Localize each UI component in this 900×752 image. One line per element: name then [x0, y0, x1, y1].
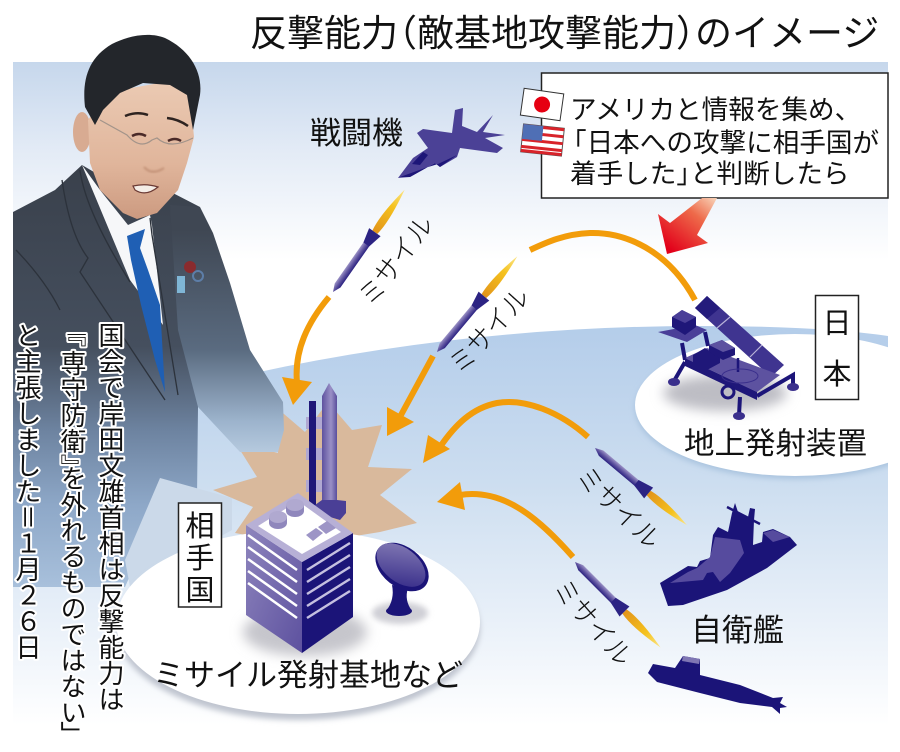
enemy island — [116, 530, 480, 714]
label: missile 2: ミサイル — [443, 283, 535, 380]
arrow: from launcher — [387, 233, 695, 436]
red arrow — [658, 198, 717, 254]
label: ground launcher: 地上発射装置 — [684, 427, 867, 461]
label: missile base: ミサイル発射基地など — [153, 658, 463, 693]
photo: Prime Minister Kishida — [13, 35, 284, 587]
caption: 『 — [57, 321, 87, 347]
lapel pins — [177, 261, 203, 293]
lapel lines — [16, 170, 178, 400]
callout box: アメリカと情報を集め、 — [570, 95, 861, 125]
arrow: from submarine — [437, 482, 573, 557]
missile from ship — [591, 443, 691, 530]
icon: launcher vehicle — [658, 296, 799, 420]
label: Japan box — [816, 296, 858, 400]
label: Japan box: 本 — [822, 358, 852, 391]
title: 反撃能力（敵基地攻撃能力）のイメージ — [250, 13, 879, 54]
label: Japan box: 日 — [822, 308, 852, 340]
icon: Japan flag — [520, 88, 564, 121]
jacket — [13, 165, 200, 587]
icon: ship — [660, 503, 797, 606]
label: missile 3: ミサイル — [570, 461, 665, 555]
label: enemy state box: 相 — [185, 510, 215, 543]
callout box: 着手した」と判断したら — [570, 159, 850, 189]
missile from submarine — [570, 557, 666, 653]
label: enemy state box — [178, 503, 222, 607]
caption: と主張しました＝１月２６日 — [12, 322, 42, 660]
arrow: from ship — [423, 402, 588, 463]
missile from fighter — [327, 186, 410, 296]
eyebrows, eyes, glasses — [100, 113, 193, 144]
caption: 」 — [57, 721, 87, 747]
label: enemy state box: 手 — [185, 542, 215, 575]
caption — [12, 317, 125, 747]
nose and mouth — [133, 167, 164, 193]
caption: を外れるものではない — [57, 465, 87, 725]
label: missile 4: ミサイル — [546, 573, 637, 671]
sea area — [13, 326, 888, 734]
hair — [84, 35, 200, 130]
callout box: 「日本への攻撃に相手国が — [560, 128, 879, 158]
hand area — [125, 478, 232, 587]
caption: 専守防衛 — [57, 350, 87, 454]
icon: submarine — [648, 656, 787, 714]
icon: rocket — [306, 383, 346, 520]
tie — [127, 229, 165, 392]
label: enemy state box: 国 — [185, 575, 215, 607]
Japan island — [635, 334, 900, 479]
shirt — [82, 165, 163, 325]
label: missile 1: ミサイル — [353, 210, 439, 312]
face — [88, 82, 194, 219]
label: fighter: 戦闘機 — [310, 116, 403, 151]
enemy island shadow — [116, 536, 480, 720]
explosion burst — [213, 402, 417, 545]
icon: US flag — [521, 124, 564, 156]
callout box — [542, 73, 888, 198]
caption: 「 — [57, 317, 87, 343]
label: ship: 自衛艦 — [691, 613, 784, 648]
sleeve — [170, 205, 284, 452]
arrow: from fighter — [282, 297, 329, 405]
icon: radar dish — [366, 533, 438, 624]
missile from launcher — [432, 252, 523, 356]
caption: 国会で岸田文雄首相は反撃能力は — [95, 322, 125, 712]
icon: fighter jet — [398, 108, 505, 178]
ear — [73, 112, 91, 152]
caption: 』 — [57, 454, 87, 480]
icon: building — [243, 493, 367, 656]
